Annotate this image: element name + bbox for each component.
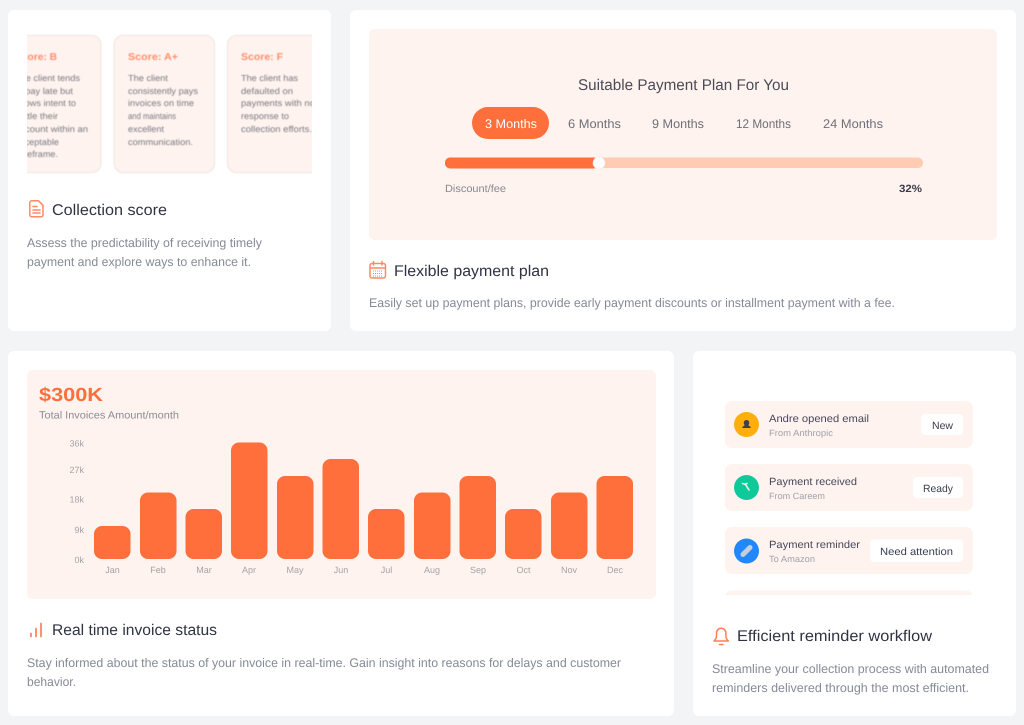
row: andre opened email: From Anthropic xyxy=(769,428,834,438)
x axis labels: Jun xyxy=(334,565,348,575)
slider xyxy=(445,157,923,169)
tabs: other durations: 12 Months xyxy=(736,117,791,131)
heading: flexible payment plan: Flexible payment plan xyxy=(394,263,549,280)
description: efficient reminder workflow: reminders delivered through the most efficient. xyxy=(712,681,969,695)
x axis labels: May xyxy=(286,565,304,575)
heading: efficient reminder workflow: Efficient reminder workflow xyxy=(737,628,933,645)
tabs: other durations xyxy=(568,117,883,131)
heading: collection score: Collection score xyxy=(52,202,167,219)
icon: document xyxy=(30,201,43,217)
y axis labels: 9k xyxy=(74,525,84,535)
score card: B: to pay late but xyxy=(15,86,74,96)
x axis labels: Aug xyxy=(424,565,440,575)
slider label: Discount/fee xyxy=(445,183,506,195)
panel: collection score xyxy=(1,10,331,331)
score card: A+: consistently pays xyxy=(128,86,199,96)
row: payment received: Payment received xyxy=(769,476,857,488)
score card: B: shows intent to xyxy=(15,98,76,108)
y axis labels: 36k xyxy=(69,438,84,448)
description: real time invoice status: Stay informed about the status of your invoice in real-time. Gain insight into reasons for delays and customer xyxy=(27,656,621,670)
row: payment received xyxy=(725,464,973,511)
score card: B: account within an xyxy=(15,124,88,134)
heading: real time invoice status: Real time invoice status xyxy=(52,622,217,639)
y axis labels xyxy=(69,438,84,565)
y axis labels: 0k xyxy=(74,555,84,565)
reminder list xyxy=(725,401,973,595)
score cards carousel xyxy=(27,34,312,174)
row: payment reminder xyxy=(725,527,973,574)
x axis labels: Sep xyxy=(470,565,486,575)
description: flexible payment plan: Easily set up payment plans, provide early payment discounts or installment payment with a fee. xyxy=(369,296,895,310)
tab: 3 months selected: 3 Months xyxy=(485,117,537,131)
y axis labels: 18k xyxy=(69,494,84,504)
panel: efficient reminder workflow xyxy=(693,351,1016,716)
score card: F: collection efforts. xyxy=(241,124,312,134)
score card: A+: and maintains xyxy=(128,111,177,121)
score card: B: timeframe. xyxy=(15,149,58,159)
y axis labels: 27k xyxy=(69,465,84,475)
score card: F: payments with no xyxy=(241,98,315,108)
x axis labels xyxy=(105,565,623,575)
description: collection score: Assess the predictability of receiving timely xyxy=(27,236,263,250)
score card: B xyxy=(27,34,102,174)
tabs: other durations: 24 Months xyxy=(823,117,883,131)
x axis labels: Feb xyxy=(150,565,166,575)
tabs: other durations: 9 Months xyxy=(652,117,704,131)
score card: A+: Score: A+ xyxy=(128,52,178,63)
score card: F: defaulted on xyxy=(241,86,293,96)
score card: F: The client has xyxy=(241,73,299,83)
panel: flexible payment plan xyxy=(350,10,1016,331)
chart panel xyxy=(27,370,656,599)
row: payment received: Ready xyxy=(923,483,954,495)
x axis labels: Jul xyxy=(381,565,392,575)
row: payment reminder: To Amazon xyxy=(769,554,815,564)
row: payment reminder: Need attention xyxy=(880,546,953,558)
total amount: $300K xyxy=(39,385,103,406)
x axis labels: Dec xyxy=(607,565,623,575)
score card: A+: The client xyxy=(128,73,169,83)
bar chart xyxy=(94,442,633,559)
description: real time invoice status: behavior. xyxy=(27,675,76,689)
payment plan widget xyxy=(369,29,997,240)
description: efficient reminder workflow: Streamline your collection process with automated xyxy=(712,662,989,676)
row: clipped next item xyxy=(726,590,972,595)
row: andre opened email: New xyxy=(932,420,953,432)
panel: real time invoice status xyxy=(8,351,674,716)
row: payment received: From Careem xyxy=(769,491,825,501)
description: collection score: payment and explore ways to enhance it. xyxy=(27,255,251,269)
x axis labels: Apr xyxy=(242,565,256,575)
description: real time invoice status xyxy=(27,656,621,689)
score card: B: The client tends xyxy=(15,73,81,83)
score card: F: response to xyxy=(241,111,289,121)
total amount caption: Total Invoices Amount/month xyxy=(39,410,179,422)
x axis labels: Mar xyxy=(196,565,212,575)
score card: B: Score: B xyxy=(15,52,57,63)
description: collection score xyxy=(27,236,263,269)
x axis labels: Oct xyxy=(516,565,531,575)
row: andre opened email: Andre opened email xyxy=(769,413,869,425)
score card: A+: communication. xyxy=(128,137,193,147)
slider value: 32% xyxy=(899,183,923,195)
x axis labels: Nov xyxy=(561,565,577,575)
score card: B: settle their xyxy=(15,111,58,121)
icon: calendar xyxy=(370,262,386,278)
row: payment reminder: Payment reminder xyxy=(769,539,861,551)
score card: F xyxy=(226,34,312,174)
score card: A+: invoices on time xyxy=(128,98,194,108)
icon: bell xyxy=(714,628,728,644)
score card: A+ xyxy=(114,36,214,172)
score card: A+: excellent xyxy=(128,124,165,134)
row: andre opened email xyxy=(725,401,973,448)
description: efficient reminder workflow xyxy=(712,662,989,695)
score card: F: Score: F xyxy=(241,52,283,63)
widget title: Suitable Payment Plan For You xyxy=(578,77,789,94)
icon: signal bars xyxy=(31,624,41,636)
x axis labels: Jan xyxy=(105,565,120,575)
score card: B: acceptable xyxy=(15,137,59,147)
tab: 3 months selected xyxy=(472,107,549,139)
tabs: other durations: 6 Months xyxy=(568,117,621,131)
